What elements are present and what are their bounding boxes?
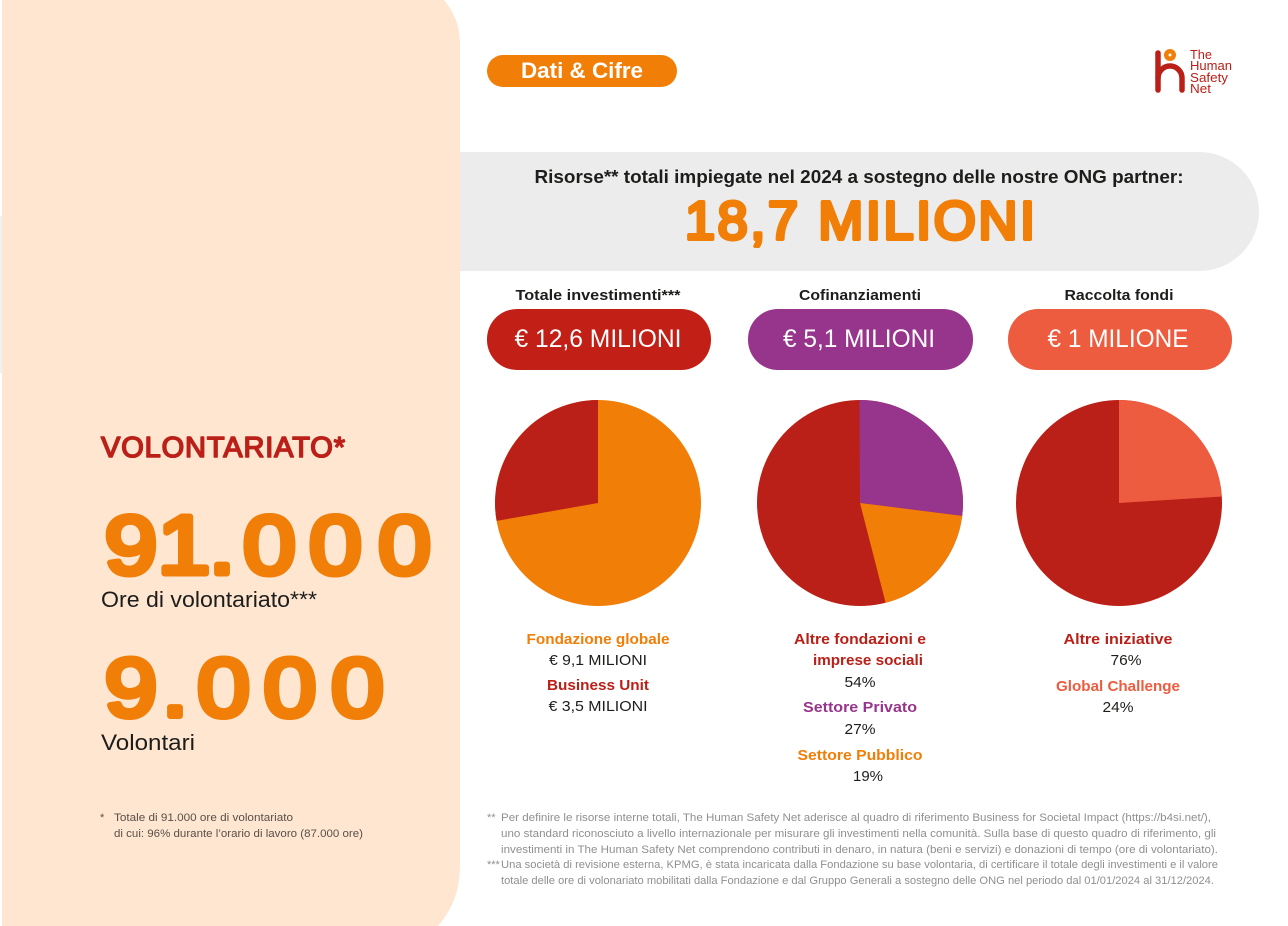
- footnote: volunteering: Totale di 91.000 ore di volontariato: [114, 812, 293, 824]
- footnote: volunteering: *: [100, 812, 105, 824]
- logo wordmark: Safety: [1190, 71, 1229, 85]
- legend: 27%: [844, 721, 876, 738]
- panel: volunteering: [2, 0, 460, 926]
- total resources figure: 18,7 MILIONI: [685, 191, 1035, 251]
- column: raccolta fondi: [1008, 287, 1232, 716]
- logo wordmark: The: [1190, 48, 1212, 62]
- footnotes: methodology: **: [487, 812, 496, 824]
- legend: 76%: [1110, 652, 1142, 669]
- stat: volunteers: 9.000: [105, 640, 384, 734]
- footnote: volunteering: [100, 812, 363, 840]
- stat: volunteers: Volontari: [101, 730, 195, 755]
- legend: imprese sociali: [813, 652, 923, 669]
- legend: Business Unit: [547, 677, 649, 694]
- legend: [526, 631, 670, 715]
- icon: h mark: [1158, 49, 1182, 90]
- amount pill: [487, 309, 711, 370]
- legend: Settore Pubblico: [798, 747, 922, 764]
- column heading: Cofinanziamenti: [799, 287, 921, 304]
- legend: Altre fondazioni e: [794, 631, 926, 648]
- legend: [1056, 631, 1180, 716]
- legend: Fondazione globale: [526, 631, 670, 648]
- footnotes: methodology: [487, 812, 1218, 887]
- stat: volunteer hours: 91.000: [105, 498, 431, 591]
- legend: Global Challenge: [1056, 678, 1180, 695]
- column: totale investimenti: [487, 287, 711, 715]
- footnotes: methodology: ***: [487, 859, 501, 871]
- total resources caption: Risorse** totali impiegate nel 2024 a sostegno delle nostre ONG partner:: [534, 167, 1184, 187]
- badge: dati e cifre: Dati & Cifre: [521, 58, 643, 83]
- amount pill: € 1 MILIONE: [1048, 325, 1188, 353]
- column heading: Totale investimenti***: [516, 287, 681, 304]
- logo wordmark: [1190, 48, 1232, 96]
- amount pill: € 12,6 MILIONI: [514, 325, 682, 353]
- amount pill: [1008, 309, 1232, 370]
- footnotes: methodology: Una società di revisione esterna, KPMG, è stata incaricata dalla Fondazione su base volontaria, di certificare il totale degli investimenti e il valore: [501, 859, 1218, 871]
- pie chart: [757, 400, 963, 606]
- footnotes: methodology: uno standard riconosciuto a livello internazionale per misurare gli investimenti nella comunità. Sulla base di questo quadro di riferimento, gli: [501, 828, 1216, 840]
- legend: 24%: [1102, 699, 1134, 716]
- pie chart: [495, 400, 701, 606]
- heading: volontariato: VOLONTARIATO*: [101, 432, 345, 464]
- logo wordmark: Human: [1190, 59, 1232, 73]
- column heading: Raccolta fondi: [1064, 287, 1174, 304]
- amount pill: [748, 309, 973, 370]
- panel: total resources: [460, 152, 1259, 271]
- footnote: volunteering: di cui: 96% durante l’orario di lavoro (87.000 ore): [114, 828, 363, 840]
- badge: dati e cifre: [487, 55, 677, 87]
- legend: € 9,1 MILIONI: [549, 652, 647, 669]
- legend: 19%: [853, 768, 883, 785]
- footnotes: methodology: totale delle ore di volonariato mobilitati dalla Fondazione e dal Gruppo Generali a sostegno delle ONG nel periodo dal 01/01/2024 al 31/12/2024.: [501, 875, 1214, 887]
- legend: [794, 631, 926, 785]
- legend: € 3,5 MILIONI: [548, 698, 648, 715]
- column: cofinanziamenti: [748, 287, 973, 785]
- logo: The Human Safety Net: [1158, 48, 1232, 96]
- legend: Altre iniziative: [1064, 631, 1172, 648]
- footnotes: methodology: investimenti in The Human Safety Net comprendono contributi in denaro, in natura (beni e servizi) e donazioni di tempo (ore di volontariato).: [501, 844, 1218, 856]
- legend: 54%: [844, 674, 876, 691]
- logo wordmark: Net: [1190, 82, 1212, 96]
- amount pill: € 5,1 MILIONI: [783, 325, 935, 353]
- stat: volunteer hours: Ore di volontariato***: [101, 587, 317, 612]
- footnotes: methodology: Per definire le risorse interne totali, The Human Safety Net aderisce al quadro di riferimento Business for Societal Impact (https://b4si.net/),: [501, 812, 1211, 824]
- legend: Settore Privato: [803, 699, 917, 716]
- pie chart: [1016, 400, 1222, 606]
